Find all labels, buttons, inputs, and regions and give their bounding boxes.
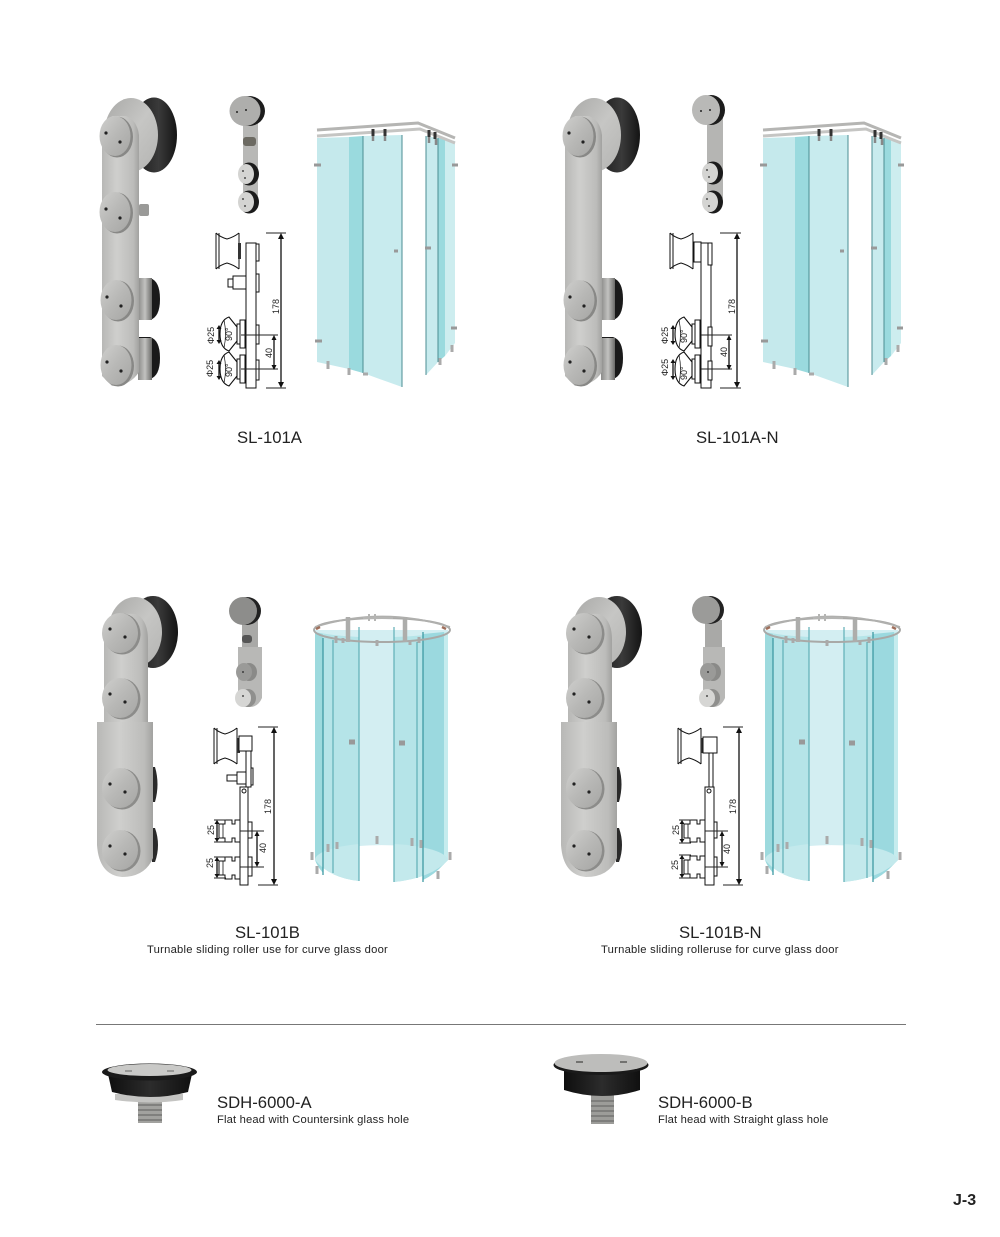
technical drawing: SL-101A: 40 xyxy=(264,348,274,358)
illustration: curved glass enclosure xyxy=(312,614,450,882)
caption: SDH-6000-B: Flat head with Straight glass hole xyxy=(658,1114,829,1126)
technical drawing: SL-101A-N: 178 xyxy=(727,299,737,314)
technical drawing: SL-101B: 178 xyxy=(263,799,273,814)
label: SDH-6000-B: SDH-6000-B xyxy=(658,1093,753,1112)
photo: SL-101A-N small view xyxy=(692,95,725,214)
technical drawing: SL-101B: 25 xyxy=(206,825,216,835)
technical drawing: SL-101B-N: 178 xyxy=(728,799,738,814)
label: SL-101A: SL-101A xyxy=(237,428,303,447)
technical drawing: SL-101A-N xyxy=(660,233,741,388)
technical drawing: SL-101B-N: 25 xyxy=(671,825,681,835)
panel: SDH-6000-A xyxy=(102,1064,409,1126)
photo: SL-101B roller xyxy=(97,596,178,877)
illustration: square glass enclosure xyxy=(314,123,458,387)
technical drawing: SL-101A-N: 90° xyxy=(679,366,689,380)
photo: SL-101A roller xyxy=(100,98,177,386)
photo: SDH-6000-A fitting xyxy=(102,1064,197,1123)
panel: SDH-6000-B xyxy=(554,1054,829,1126)
photo: SL-101B small view xyxy=(229,597,262,707)
technical drawing: SL-101A: 178 xyxy=(271,299,281,314)
label: SL-101B: SL-101B xyxy=(235,923,300,942)
technical drawing: SL-101B-N: 40 xyxy=(722,844,732,854)
photo: SL-101A small view xyxy=(230,96,265,214)
caption: SL-101B-N: Turnable sliding rolleruse for curve glass door xyxy=(601,944,839,956)
technical drawing: SL-101A xyxy=(205,233,286,388)
technical drawing: SL-101A-N: Φ25 xyxy=(660,359,670,376)
technical drawing: SL-101A: 90° xyxy=(224,327,234,341)
panel: SL-101B-N xyxy=(561,596,900,956)
technical drawing: SL-101B-N xyxy=(670,727,743,885)
panel: SL-101A-N xyxy=(562,95,904,447)
panel: SL-101B xyxy=(97,596,450,956)
technical drawing: SL-101A: Φ25 xyxy=(206,327,216,344)
page number: J-3 xyxy=(953,1192,976,1209)
technical drawing: SL-101A: 90° xyxy=(224,363,234,377)
photo: SL-101B-N roller xyxy=(561,596,642,877)
technical drawing: SL-101B-N: 25 xyxy=(670,860,680,870)
photo: SL-101A-N roller xyxy=(562,98,640,386)
caption: SDH-6000-A: Flat head with Countersink glass hole xyxy=(217,1114,409,1126)
technical drawing: SL-101B: 25 xyxy=(205,858,215,868)
photo: SL-101B-N small view xyxy=(692,596,725,707)
label: SDH-6000-A: SDH-6000-A xyxy=(217,1093,312,1112)
technical drawing: SL-101A-N: Φ25 xyxy=(660,327,670,344)
label: SL-101A-N: SL-101A-N xyxy=(696,428,779,447)
panel: SL-101A xyxy=(100,96,458,447)
technical drawing: SL-101A: Φ25 xyxy=(205,360,215,377)
technical drawing: SL-101B xyxy=(205,727,278,885)
technical drawing: SL-101A-N: 40 xyxy=(719,347,729,357)
illustration: curved glass enclosure xyxy=(762,614,900,882)
technical drawing: SL-101B: 40 xyxy=(258,843,268,853)
label: SL-101B-N: SL-101B-N xyxy=(679,923,762,942)
illustration: square glass enclosure xyxy=(760,123,904,387)
photo: SDH-6000-B fitting xyxy=(554,1054,648,1124)
technical drawing: SL-101A-N: 90° xyxy=(679,329,689,343)
caption: SL-101B: Turnable sliding roller use for curve glass door xyxy=(147,944,388,956)
